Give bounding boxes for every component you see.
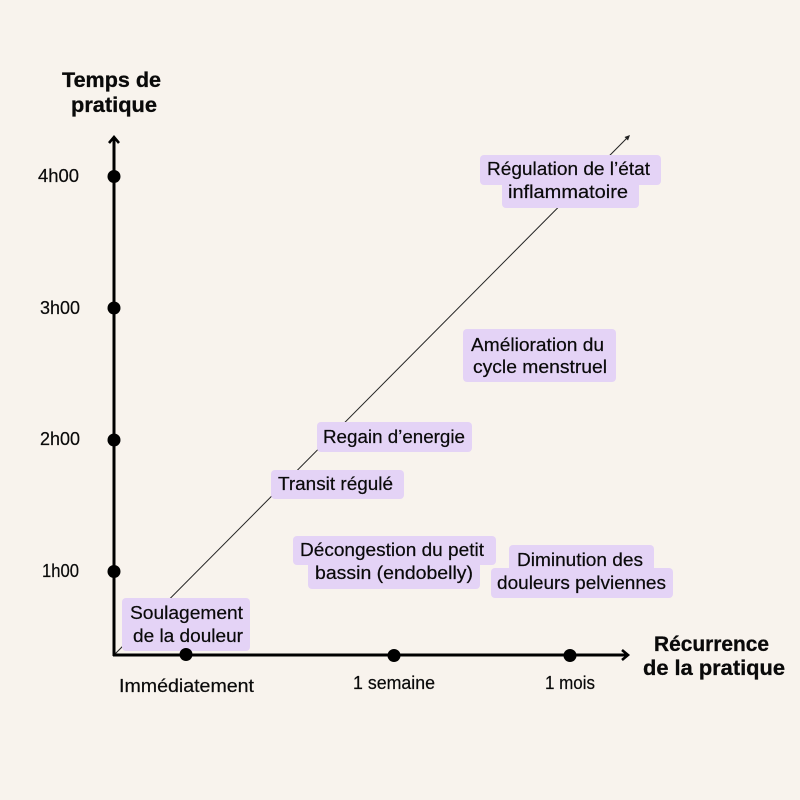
label: regain d'energie: Regain d’energie bbox=[323, 427, 465, 447]
label: décongestion du petit bassin: bassin (endobelly) bbox=[315, 563, 473, 583]
label: soulagement de la douleur: Soulagement bbox=[130, 603, 243, 623]
label: transit régulé: Transit régulé bbox=[278, 474, 393, 494]
y axis title: Temps de bbox=[62, 69, 161, 92]
label: amélioration du cycle menstruel: Amélioration du bbox=[471, 335, 604, 355]
y axis tick labels: 4h00 bbox=[38, 166, 79, 186]
label: décongestion du petit bassin: Décongestion du petit bbox=[300, 540, 484, 560]
x axis tick labels: Immédiatement bbox=[119, 676, 254, 696]
label: transit régulé bbox=[271, 470, 404, 499]
label: soulagement de la douleur bbox=[122, 598, 250, 651]
x axis title: de la pratique bbox=[643, 657, 785, 680]
y axis title: pratique bbox=[71, 94, 157, 117]
label: amélioration du cycle menstruel: cycle menstruel bbox=[473, 357, 607, 377]
x axis tick labels: 1 semaine bbox=[353, 673, 435, 693]
label: décongestion du petit bassin bbox=[293, 536, 496, 589]
y axis tick labels: 2h00 bbox=[40, 429, 80, 449]
y axis tick labels: 3h00 bbox=[40, 298, 80, 318]
label: amélioration du cycle menstruel bbox=[463, 329, 616, 382]
label: soulagement de la douleur: de la douleur bbox=[133, 626, 243, 646]
vertical axis: temps de pratique bbox=[108, 137, 120, 656]
x axis title bbox=[643, 633, 785, 680]
label: régulation de l'état inflammatoire: Régulation de l’état bbox=[487, 159, 650, 179]
horizontal axis: récurrence de la pratique bbox=[113, 648, 628, 662]
x axis tick labels bbox=[119, 673, 595, 696]
diagonal trend arrow bbox=[114, 135, 630, 655]
label: diminution des douleurs pelviennes bbox=[491, 545, 673, 598]
y axis title bbox=[62, 69, 161, 117]
y axis tick labels bbox=[38, 166, 80, 581]
label: diminution des douleurs pelviennes: Diminution des bbox=[517, 550, 643, 570]
label: régulation de l'état inflammatoire: inflammatoire bbox=[508, 182, 628, 202]
label: regain d'energie bbox=[317, 422, 472, 452]
label: régulation de l'état inflammatoire bbox=[480, 155, 661, 208]
x axis title: Récurrence bbox=[654, 633, 769, 656]
x axis tick labels: 1 mois bbox=[545, 673, 595, 693]
y axis tick labels: 1h00 bbox=[42, 561, 79, 581]
label: diminution des douleurs pelviennes: douleurs pelviennes bbox=[497, 573, 666, 593]
